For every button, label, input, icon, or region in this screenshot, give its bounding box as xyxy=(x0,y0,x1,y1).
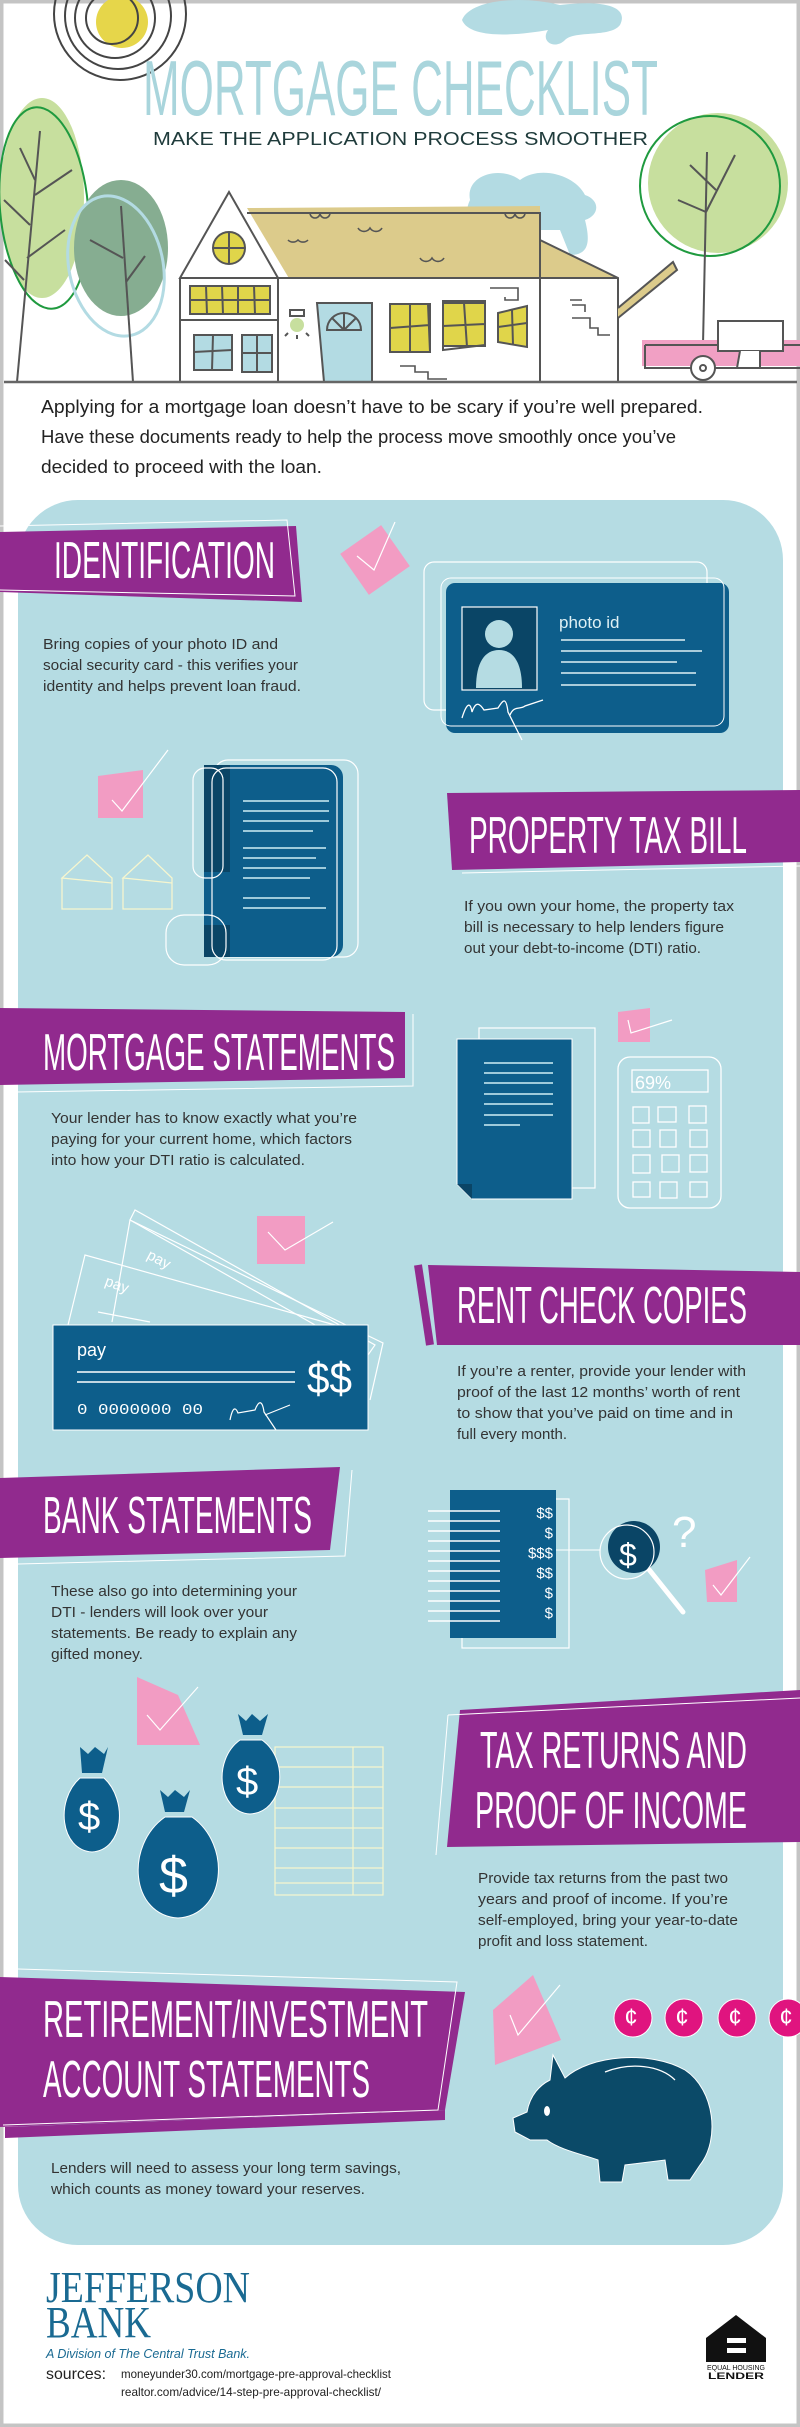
footer: Jefferson Bank logo: BANK xyxy=(46,2298,151,2347)
icon: equal housing lender xyxy=(706,2315,766,2381)
icon: bank statement: $ xyxy=(545,1605,554,1622)
icon: magnifier: ? xyxy=(672,1508,696,1557)
icon: magnifier xyxy=(556,1508,696,1612)
heading banner xyxy=(418,1265,800,1345)
heading banner: BANK STATEMENTS xyxy=(43,1487,312,1545)
icon: check box xyxy=(340,522,410,595)
heading banner: IDENTIFICATION xyxy=(54,532,275,590)
house xyxy=(180,192,677,382)
footer: sources: realtor.com/advice/14-step-pre-approval-checklist/ xyxy=(121,2385,382,2399)
footer: sources xyxy=(46,2366,392,2399)
header illustration xyxy=(0,0,800,382)
cloud top xyxy=(462,0,622,45)
tree: left light xyxy=(0,98,97,382)
icon: calculator: 69% xyxy=(635,1073,671,1093)
icon: check box xyxy=(257,1216,333,1264)
icon: equal housing lender: LENDER xyxy=(708,2371,765,2381)
icon: bank statement: $ xyxy=(545,1585,554,1602)
text block: out your debt-to-income (DTI) ratio. xyxy=(464,940,701,957)
text block: Bring copies of your photo ID and xyxy=(43,636,278,653)
icon: bank statement: $$ xyxy=(536,1505,554,1522)
icon: bank statement: $ xyxy=(545,1525,554,1542)
icon: bank statement xyxy=(428,1490,569,1648)
footer: sources: sources: xyxy=(46,2366,106,2383)
icon: sun xyxy=(54,0,186,80)
text block xyxy=(50,2160,401,2198)
icon: coins: ¢ xyxy=(779,2004,793,2031)
panel: checklist background xyxy=(18,500,783,2245)
heading banner: RETIREMENT/INVESTMENT xyxy=(43,1991,428,2049)
text block: years and proof of income. If you’re xyxy=(478,1891,728,1908)
icon: ledger table xyxy=(275,1747,383,1895)
text block: gifted money. xyxy=(51,1646,143,1663)
heading banner xyxy=(0,520,302,602)
text block: Your lender has to know exactly what you’re xyxy=(51,1110,357,1127)
text block: self-employed, bring your year-to-date xyxy=(478,1912,738,1929)
icon: house outlines xyxy=(62,855,172,909)
panel: mortgage statements xyxy=(0,1008,721,1208)
text block xyxy=(51,1110,357,1169)
tree: right xyxy=(640,113,788,345)
text block: proof of the last 12 months’ worth of rent xyxy=(457,1384,741,1401)
icon: checks: 0 0000000 00 xyxy=(77,1402,203,1419)
icon: money bags: $ xyxy=(78,1795,100,1839)
text block: into how your DTI ratio is calculated. xyxy=(51,1152,305,1169)
icon: money bags xyxy=(64,1714,280,1918)
panel: property tax bill xyxy=(62,750,800,965)
ground line xyxy=(4,381,797,383)
heading banner xyxy=(436,1690,800,1855)
heading banner: MORTGAGE STATEMENTS xyxy=(43,1024,395,1082)
heading banner: ACCOUNT STATEMENTS xyxy=(43,2051,370,2109)
icon: equal housing lender: EQUAL HOUSING xyxy=(707,2365,765,2372)
icon: checks: $$ xyxy=(307,1354,352,1403)
icon: money bags: $ xyxy=(159,1847,188,1905)
icon: coins: ¢ xyxy=(728,2004,742,2031)
heading banner xyxy=(0,1969,465,2138)
icon: checks xyxy=(53,1210,383,1430)
footer: Jefferson Bank logo: A Division of The Central Trust Bank. xyxy=(45,2346,250,2361)
intro text: Applying for a mortgage loan doesn’t have to be scary if you’re well prepared. xyxy=(41,397,703,417)
subtitle: MAKE THE APPLICATION PROCESS SMOOTHER xyxy=(153,129,648,149)
icon: check box xyxy=(98,750,168,818)
panel: bank statements xyxy=(0,1467,750,1918)
intro text: decided to proceed with the loan. xyxy=(41,457,322,477)
icon: checks: pay xyxy=(144,1247,174,1273)
icon: check box xyxy=(705,1557,750,1602)
text block: Lenders will need to assess your long term savings, xyxy=(51,2160,401,2177)
tree: left dark xyxy=(55,180,177,382)
icon: bank statement: $$ xyxy=(536,1565,554,1582)
panel: retirement/investment xyxy=(0,1969,800,2198)
icon: coins: ¢ xyxy=(624,2004,638,2031)
panel: rent check copies xyxy=(53,1210,800,1443)
icon: scroll document xyxy=(166,760,358,965)
heading banner xyxy=(0,1008,413,1092)
icon: statement document xyxy=(457,1028,595,1199)
panel: tax returns and proof of income xyxy=(436,1690,800,1950)
text block: statements. Be ready to explain any xyxy=(51,1625,298,1642)
text block xyxy=(43,636,301,695)
text block: If you own your home, the property tax xyxy=(464,898,735,915)
icon: check box xyxy=(137,1677,200,1745)
text block xyxy=(457,1363,746,1443)
icon: check box xyxy=(493,1975,561,2065)
footer: Jefferson Bank logo xyxy=(45,2263,250,2361)
icon: photo id card xyxy=(424,562,729,740)
icon: checks: pay xyxy=(103,1273,132,1297)
intro text: Have these documents ready to help the process move smoothly once you’ve xyxy=(41,427,676,447)
footer: sources: moneyunder30.com/mortgage-pre-approval-checklist xyxy=(121,2367,392,2381)
icon: coins xyxy=(614,1999,800,2037)
text block: which counts as money toward your reserves. xyxy=(50,2181,365,2198)
text block: full every month. xyxy=(457,1426,567,1443)
icon: magnifier: $ xyxy=(619,1537,637,1573)
text block xyxy=(51,1583,298,1663)
heading banner xyxy=(0,1467,352,1564)
text block: social security card - this verifies your xyxy=(43,657,298,674)
truck xyxy=(642,321,800,380)
icon: money bags: $ xyxy=(236,1760,258,1804)
icon: check box xyxy=(618,1008,672,1042)
icon: bank statement: $$$ xyxy=(528,1545,554,1562)
icon: coins: ¢ xyxy=(675,2004,689,2031)
text block: Provide tax returns from the past two xyxy=(478,1870,728,1887)
text block: DTI - lenders will look over your xyxy=(51,1604,268,1621)
text block xyxy=(478,1870,738,1950)
text block xyxy=(464,898,735,957)
intro text xyxy=(41,397,703,477)
heading banner xyxy=(447,790,800,873)
icon: calculator xyxy=(618,1057,721,1208)
text block: to show that you’ve paid on time and in xyxy=(457,1405,733,1422)
text block: These also go into determining your xyxy=(51,1583,297,1600)
icon: piggy bank xyxy=(513,2055,712,2182)
icon: photo id card: photo id xyxy=(559,613,620,632)
cloud behind house xyxy=(467,173,596,255)
text block: profit and loss statement. xyxy=(478,1933,648,1950)
footer: Jefferson Bank logo: JEFFERSON xyxy=(46,2263,250,2312)
text block: bill is necessary to help lenders figure xyxy=(464,919,724,936)
text block: paying for your current home, which factors xyxy=(51,1131,352,1148)
text block: identity and helps prevent loan fraud. xyxy=(43,678,301,695)
text block: If you’re a renter, provide your lender with xyxy=(457,1363,746,1380)
panel: identification xyxy=(0,520,729,740)
icon: checks: pay xyxy=(77,1340,106,1360)
